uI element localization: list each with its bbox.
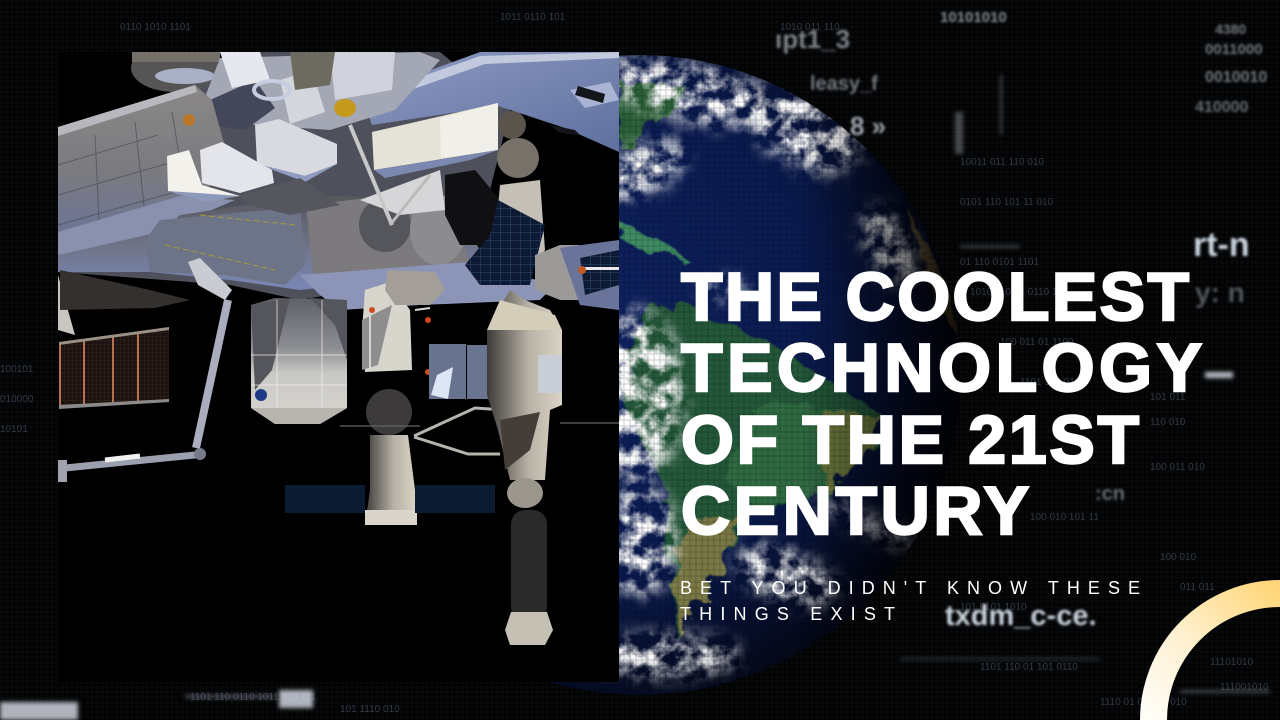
earth globe	[320, 45, 970, 700]
large grey laboratory module	[58, 85, 235, 256]
glowing code fragments: ıpt1_3	[775, 24, 850, 54]
faint binary text: 10011 011 110 010	[960, 157, 1044, 168]
solar blue radiator top right	[360, 52, 619, 152]
brown solar array	[58, 275, 169, 409]
station base structure	[58, 52, 510, 300]
space station photo panel	[58, 44, 619, 682]
faint binary text: 1110 01 011 00 010	[1100, 697, 1187, 708]
title: TECHNOLOGY	[681, 330, 1202, 406]
title: OF THE 21ST	[681, 402, 1139, 478]
faint binary text: 011 011	[1180, 582, 1215, 593]
faint binary text: 100 010	[1160, 552, 1197, 563]
glowing code fragments: :cn	[1095, 483, 1125, 505]
faint binary text: 1010 110 01 0110 1	[970, 287, 1058, 298]
continents	[620, 80, 962, 639]
faint binary text: 101 1110 010	[340, 704, 400, 715]
glowing code fragments: ke.com/u1	[880, 393, 944, 408]
faint binary text: 0101 110 101 11 010	[960, 197, 1053, 208]
faint binary text: 1011 0110 101	[500, 12, 566, 23]
truss strip left	[60, 270, 190, 310]
faint binary text: 100101	[0, 364, 34, 375]
title	[681, 259, 1202, 549]
glowing code fragments: rt-n	[1193, 226, 1250, 264]
ocean	[551, 55, 954, 695]
upper truss machinery	[200, 52, 440, 130]
top docking ring	[131, 52, 220, 92]
faint binary text: 1101 110 01 101 0110	[980, 662, 1078, 673]
right soyuz stack	[340, 290, 619, 645]
central soyuz stack	[285, 270, 495, 525]
white cargo boxes	[167, 103, 498, 225]
faint binary text: 110 010	[1150, 417, 1186, 428]
glowing code fragments: y: n	[1195, 277, 1245, 308]
glowing code fragments	[775, 9, 1267, 632]
title: THE COOLEST	[681, 259, 1189, 335]
glowing code fragments: 10101010	[940, 9, 1007, 26]
white cylinder module with NASA logo	[251, 298, 347, 424]
glowing code fragments: 0011000	[1205, 41, 1263, 58]
black docked spacecraft	[445, 170, 498, 245]
faint binary text: 010000	[0, 394, 34, 405]
glowing code fragments: 0010010	[1205, 69, 1267, 86]
faint binary text: 0110 1010 1101	[120, 22, 191, 33]
faint binary text: 10101	[0, 424, 28, 435]
glowing code fragments: txdm_c-ce.	[945, 600, 1097, 632]
faint binary text: 1101 110 0110 1011 010 111	[190, 692, 317, 703]
subtitle	[680, 578, 1140, 624]
robotic arm left	[58, 258, 232, 482]
faint binary text: 11101010	[1210, 657, 1253, 668]
faint binary text: 101 0101 1010	[960, 602, 1027, 613]
subtitle: BET YOU DIDN'T KNOW THESE	[680, 578, 1140, 598]
faint binary text: 101 011	[1150, 392, 1186, 403]
subtitle: THINGS EXIST	[680, 604, 895, 624]
glowing code fragments: leasy_f	[810, 73, 878, 95]
decorative gradient ring	[1154, 594, 1280, 720]
cloud systems	[585, 45, 932, 675]
faint binary text: 111001010	[1220, 682, 1269, 693]
glowing code fragments: 8 »	[850, 111, 886, 141]
right node and solar wing	[465, 111, 619, 310]
faint binary text: 100 011 01 1100	[1000, 337, 1074, 348]
faint binary text: 1010 011 110	[780, 22, 840, 33]
grey square panels	[413, 344, 500, 456]
tile overlay and shaded limb	[600, 55, 929, 690]
faint binary text: 1101 100 011 0	[1020, 377, 1088, 388]
faint binary text: 100 011 010	[1150, 462, 1205, 473]
lower cylindrical modules	[58, 190, 555, 310]
glowing code fragments: 4380	[1215, 21, 1246, 37]
title: CENTURY	[681, 473, 1029, 549]
glowing code fragments: 410000	[1195, 99, 1248, 116]
faint binary text: 01 110 0101 1101	[960, 257, 1040, 268]
faint binary text: 100 010 101 11	[1030, 512, 1099, 523]
